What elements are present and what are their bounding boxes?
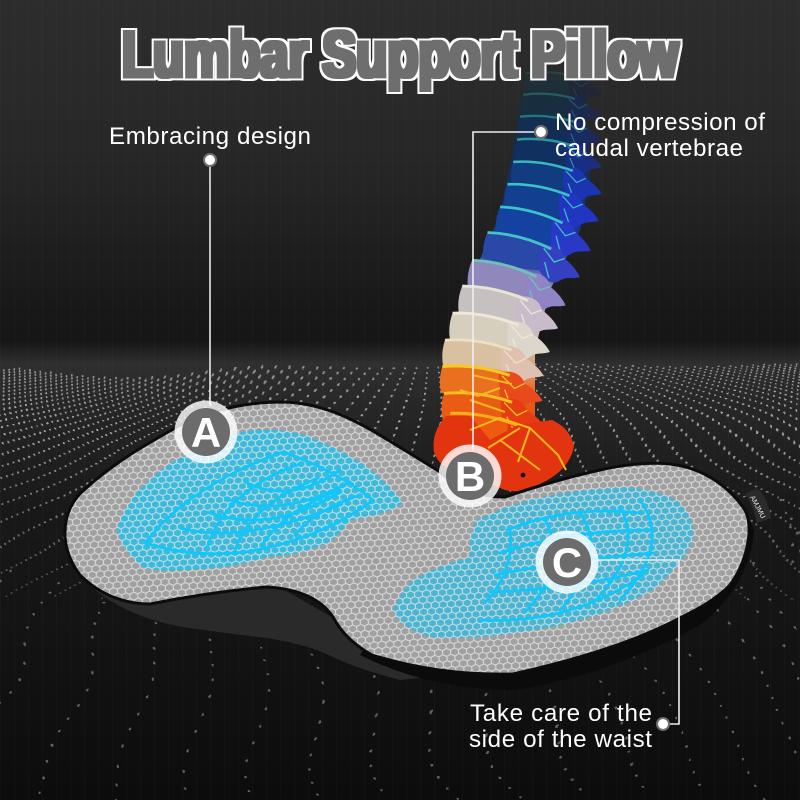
dotted wave floor: [0, 366, 800, 600]
side wall mesh fabric: [95, 580, 450, 680]
blue zone A: [117, 430, 403, 571]
blue zone C: [393, 487, 693, 638]
pillow outline binding: [65, 402, 749, 674]
badge C: C: [552, 539, 582, 586]
pressure grid A: [145, 452, 373, 554]
callout: no compression of caudal vertebrae: caudal vertebrae: [555, 135, 743, 162]
badge C: [536, 530, 598, 594]
pillow base edge: [360, 500, 754, 690]
callout: no compression of caudal vertebrae: No compression of: [555, 109, 765, 136]
sacrum: [434, 416, 574, 491]
lower sparse dots: [0, 500, 800, 800]
callout: embracing design: Embracing design: [109, 123, 311, 150]
badge A: A: [191, 409, 221, 456]
spine illustration: [434, 71, 604, 495]
callout: no compression of caudal vertebrae: [473, 109, 765, 450]
badge A: [174, 400, 238, 464]
callout: take care of the side of the waist: [469, 560, 679, 753]
sacrum foramina: [521, 473, 530, 495]
badge B: [438, 444, 502, 508]
callout: take care of the side of the waist: Take care of the: [470, 700, 652, 727]
vertebrae: pale middle section: [440, 257, 571, 387]
badge B: B: [455, 453, 485, 500]
vertebrae: cervical / thoracic blue section: [479, 71, 604, 288]
pillow top surface: [65, 402, 749, 674]
spine column backing: [445, 80, 590, 430]
brand tag: [745, 488, 771, 523]
vertebrae: inflamed orange section: [438, 364, 556, 466]
callout: take care of the side of the waist: side of the waist: [469, 726, 652, 753]
brand tag: AMJMU: [748, 495, 766, 520]
sacrum highlights: [460, 375, 566, 470]
callout: embracing design: [109, 123, 311, 405]
mesh fabric texture: [65, 402, 749, 674]
pressure grid C: [480, 500, 653, 620]
